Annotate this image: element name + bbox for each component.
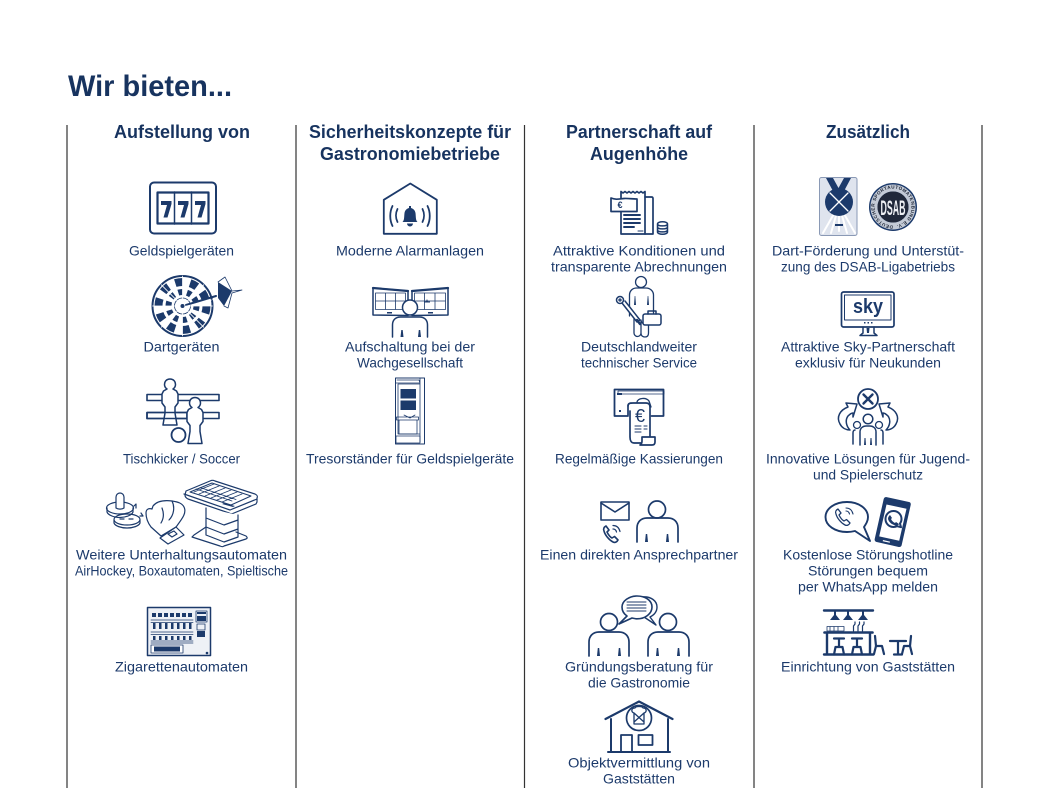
label: Regelmäßige Kassierungen: Regelmäßige Kassierungen xyxy=(555,450,723,466)
icon: dart league logos xyxy=(819,177,917,236)
icon: league card xyxy=(820,178,857,236)
label: Deutschlandweiter technischer Service xyxy=(581,338,697,370)
label: Kostenlose Störungshotline, Störungen bequem per WhatsApp melden: per WhatsApp melden xyxy=(798,578,938,594)
label: Dartgeräten: Dartgeräten xyxy=(144,338,220,354)
icon: air hockey, boxing glove, game table xyxy=(106,480,257,547)
heading: Partnerschaft auf Augenhöhe: Partnerschaft auf xyxy=(566,122,713,142)
label: Aufschaltung bei der Wachgesellschaft xyxy=(345,338,475,370)
label: Deutschlandweiter technischer Service: technischer Service xyxy=(581,354,697,370)
heading: Zusätzlich: Zusätzlich xyxy=(826,122,910,142)
icon: cash collection receipt xyxy=(614,390,664,445)
label: Moderne Alarmanlagen: Moderne Alarmanlagen xyxy=(336,242,484,258)
icon: cigarette machine xyxy=(148,608,210,656)
icon: consultation between two people xyxy=(589,596,689,656)
label: Innovative Lösungen für Jugend- und Spielerschutz: und Spielerschutz xyxy=(813,466,923,482)
icon: safe stand xyxy=(396,378,424,444)
icon: monitor with sky logo xyxy=(842,292,894,336)
heading: Sicherheitskonzepte für Gastronomiebetriebe: Gastronomiebetriebe xyxy=(320,144,500,164)
icon: house with alarm bell xyxy=(384,184,437,234)
icon: service technician with tools xyxy=(616,276,661,337)
label: Geldspielgeräten: Geldspielgeräten xyxy=(129,242,234,258)
label: Objektvermittlung von Gaststätten: Objektvermittlung von xyxy=(568,754,710,770)
label: Attraktive Sky-Partnerschaft exklusiv für Neukunden xyxy=(781,338,955,370)
panel: Sicherheitskonzepte xyxy=(306,122,514,466)
icon: cash collection receipt: € xyxy=(635,406,645,426)
heading: Sicherheitskonzepte für Gastronomiebetriebe xyxy=(309,122,511,164)
title: Wir bieten... xyxy=(68,70,232,103)
panel: Partnerschaft auf Augenhöhe xyxy=(540,122,738,786)
label: Dart-Förderung und Unterstützung des DSAB-Ligabetriebs: zung des DSAB-Ligabetriebs xyxy=(781,258,955,274)
icon: envelope, phone and contact person xyxy=(601,501,678,542)
label: Attraktive Sky-Partnerschaft exklusiv für Neukunden: Attraktive Sky-Partnerschaft xyxy=(781,338,955,354)
label: Innovative Lösungen für Jugend- und Spielerschutz: Innovative Lösungen für Jugend- xyxy=(766,450,970,466)
label: Weitere Unterhaltungsautomaten: Weitere Unterhaltungsautomaten xyxy=(76,546,287,562)
label: Aufschaltung bei der Wachgesellschaft: Wachgesellschaft xyxy=(357,354,463,370)
label: Gründungsberatung für die Gastronomie xyxy=(565,658,713,690)
label: Einrichtung von Gaststätten: Einrichtung von Gaststätten xyxy=(781,658,955,674)
label: Attraktive Konditionen und transparente Abrechnungen: transparente Abrechnungen xyxy=(551,258,727,274)
icon: person at monitoring screens xyxy=(373,288,448,337)
label: Dart-Förderung und Unterstützung des DSAB-Ligabetriebs xyxy=(772,242,964,274)
label: Dart-Förderung und Unterstützung des DSAB-Ligabetriebs: Dart-Förderung und Unterstüt- xyxy=(772,242,964,258)
icon: invoice, banknote and coins: € xyxy=(617,200,623,210)
icon: bar and restaurant furniture xyxy=(824,610,912,654)
label: Gründungsberatung für die Gastronomie: Gründungsberatung für xyxy=(565,658,713,674)
label: Objektvermittlung von Gaststätten: Gaststätten xyxy=(603,770,675,786)
icon: restaurant building with chef xyxy=(606,702,672,752)
label: Kostenlose Störungshotline, Störungen bequem per WhatsApp melden: Kostenlose Störungshotline xyxy=(783,546,953,562)
label: Attraktive Konditionen und transparente Abrechnungen: Attraktive Konditionen und xyxy=(553,242,725,258)
icon: DSAB badge: DEUTSCHER SPORTAUTOMATENBUND E.V. xyxy=(871,185,915,229)
icon: DSAB badge: DSAB xyxy=(880,197,906,220)
label: Kostenlose Störungshotline, Störungen bequem per WhatsApp melden: Störungen bequem xyxy=(808,562,928,578)
panel: Zusätzlich xyxy=(766,122,970,674)
icon: dartboard and dart xyxy=(152,276,242,336)
label: Innovative Lösungen für Jugend- und Spielerschutz xyxy=(766,450,970,482)
label: Tresorständer für Geldspielgeräte: Tresorständer für Geldspielgeräte xyxy=(306,450,514,466)
icon: table soccer xyxy=(147,379,219,444)
label: Tischkicker / Soccer: Tischkicker / Soccer xyxy=(123,450,240,466)
icon: monitor with sky logo: sky xyxy=(853,296,884,318)
heading: Aufstellung von: Aufstellung von xyxy=(114,122,250,142)
panel: Aufstellung von xyxy=(75,122,288,674)
heading: Partnerschaft auf Augenhöhe: Augenhöhe xyxy=(590,144,688,164)
icon: youth and player protection xyxy=(838,389,898,445)
label: Zigarettenautomaten: Zigarettenautomaten xyxy=(115,658,248,674)
icon: slot machine xyxy=(150,182,216,234)
heading: Partnerschaft auf Augenhöhe xyxy=(566,122,713,164)
label: AirHockey, Boxautomaten, Spieltische: AirHockey, Boxautomaten, Spieltische xyxy=(75,562,288,578)
label: Attraktive Sky-Partnerschaft exklusiv für Neukunden: exklusiv für Neukunden xyxy=(795,354,941,370)
icon: invoice, banknote and coins xyxy=(611,192,668,234)
icon: hotline bubble and WhatsApp phone xyxy=(826,497,911,547)
label: Objektvermittlung von Gaststätten xyxy=(568,754,710,786)
label: Aufschaltung bei der Wachgesellschaft: Aufschaltung bei der xyxy=(345,338,475,354)
label: Gründungsberatung für die Gastronomie: die Gastronomie xyxy=(588,674,690,690)
label: Einen direkten Ansprechpartner: Einen direkten Ansprechpartner xyxy=(540,546,738,562)
label: Deutschlandweiter technischer Service: Deutschlandweiter xyxy=(581,338,697,354)
heading: Sicherheitskonzepte für Gastronomiebetriebe: Sicherheitskonzepte für xyxy=(309,122,511,142)
label: Kostenlose Störungshotline, Störungen bequem per WhatsApp melden xyxy=(783,546,953,594)
label: Attraktive Konditionen und transparente Abrechnungen xyxy=(551,242,727,274)
